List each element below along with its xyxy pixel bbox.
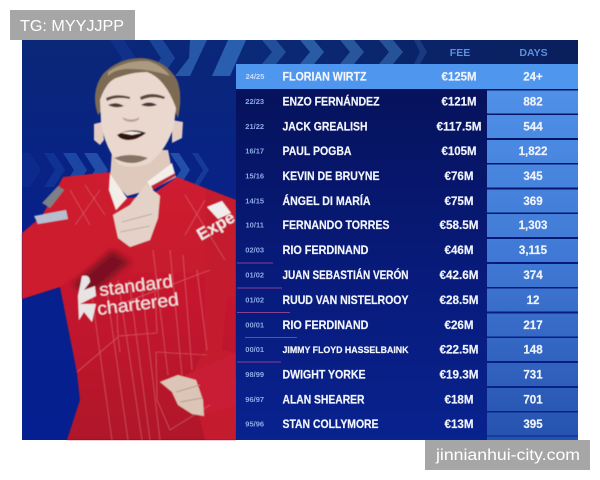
- row: Dwight Yorke: €19.3M: [440, 369, 478, 381]
- column header: days: DAYS: [519, 47, 548, 59]
- row: Florian Wirtz: €125M: [442, 71, 476, 83]
- row: Alan Shearer: 96/97: [245, 395, 264, 404]
- row: Kevin De Bruyne: 345: [523, 171, 543, 183]
- row: Enzo Fernández: 882: [523, 96, 543, 108]
- row: Alan Shearer: 701: [523, 394, 543, 406]
- row: Ángel Di María: 369: [523, 196, 543, 208]
- row: Paul Pogba: 1,822: [519, 146, 547, 158]
- row: Florian Wirtz: 24/25: [246, 72, 264, 81]
- row: Rio Ferdinand 02/03: RIO FERDINAND: [282, 245, 368, 257]
- row: Stan Collymore: 395: [523, 419, 543, 431]
- row: Jimmy Floyd Hasselbaink: [245, 338, 578, 361]
- cuff: [185, 353, 236, 414]
- row: Rio Ferdinand 02/03: €46M: [444, 245, 474, 257]
- row: Kevin De Bruyne: 15/16: [245, 171, 264, 180]
- row: Ruud van Nistelrooy: 12: [527, 295, 539, 307]
- hair highlight: [108, 61, 170, 76]
- shirt body: [60, 172, 236, 440]
- goatee: [114, 155, 148, 163]
- row: Ángel Di María: ÁNGEL DI MARÍA: [282, 195, 370, 208]
- sponsor text: [96, 271, 180, 319]
- row: Jimmy Floyd Hasselbaink: 148: [523, 344, 543, 356]
- upper hand: [113, 184, 160, 247]
- nose: [122, 117, 140, 122]
- watermark: bottom right: jinnianhui-city.com: [435, 447, 580, 464]
- row: Rio Ferdinand 02/03: 3,115: [519, 245, 548, 257]
- row: Ángel Di María: [245, 190, 578, 212]
- row: Enzo Fernández: 22/23: [245, 97, 264, 106]
- row: Florian Wirtz: 24+: [523, 71, 543, 83]
- row: Jack Grealish: [245, 115, 578, 138]
- row: Fernando Torres: [246, 214, 578, 237]
- row: Dwight Yorke: 731: [523, 369, 543, 381]
- row: Ángel Di María: 14/15: [245, 196, 264, 205]
- row: Stan Collymore: [245, 412, 578, 436]
- table rows panel background: [236, 89, 578, 440]
- row: Jack Grealish: 544: [523, 121, 543, 133]
- lower hand: [160, 375, 204, 416]
- next row sliver: [487, 436, 578, 440]
- row: Kevin De Bruyne: KEVIN DE BRUYNE: [282, 171, 380, 183]
- row: Alan Shearer: €18M: [444, 394, 474, 406]
- sponsor text: chartered: [96, 289, 180, 319]
- row: Paul Pogba: 16/17: [245, 146, 264, 155]
- row: Kevin De Bruyne: [245, 164, 578, 188]
- eyebrows: [106, 95, 130, 101]
- row: Enzo Fernández: €121M: [442, 96, 476, 108]
- panel: infographic background: [22, 40, 578, 440]
- row: Dwight Yorke: [245, 363, 578, 386]
- champions league patch: [42, 186, 64, 208]
- player photo: [22, 58, 238, 440]
- ears: [94, 122, 104, 145]
- row: Enzo Fernández: [245, 90, 578, 114]
- row: Paul Pogba: €105M: [442, 146, 476, 158]
- neck: [110, 150, 172, 196]
- row: Ruud van Nistelrooy: €28.5M: [440, 295, 478, 307]
- row: Jack Grealish: €117.5M: [436, 121, 482, 133]
- row: Enzo Fernández: ENZO FERNÁNDEZ: [282, 95, 380, 108]
- watermark: top left: [10, 10, 135, 40]
- standard chartered logo mark: [78, 276, 96, 322]
- right arm and cuff: [190, 188, 237, 440]
- middle chevron pattern: [22, 153, 209, 187]
- row: Fernando Torres: 10/11: [246, 220, 264, 229]
- row: Rio Ferdinand 02/03: [245, 239, 578, 262]
- row: Dwight Yorke: 98/99: [245, 370, 264, 379]
- row: Ruud van Nistelrooy: RUUD VAN NISTELROOY: [282, 295, 409, 307]
- row: Jack Grealish: 21/22: [245, 122, 264, 131]
- column header: fee: FEE: [450, 47, 470, 59]
- row: Stan Collymore: 95/96: [245, 419, 264, 428]
- row: Rio Ferdinand 00/01: RIO FERDINAND: [282, 320, 368, 332]
- row: Jimmy Floyd Hasselbaink: 00/01: [245, 345, 264, 354]
- row: Jack Grealish: JACK GREALISH: [282, 121, 368, 133]
- row: Rio Ferdinand 00/01: €26M: [444, 320, 474, 332]
- row: Fernando Torres: €58.5M: [440, 220, 478, 232]
- row: Ángel Di María: €75M: [444, 196, 474, 208]
- sleeve badge: [34, 210, 68, 224]
- watermark: top left: TG: MYYJJPP: [20, 18, 124, 35]
- expedia text: Expe: [194, 208, 238, 244]
- hair: [95, 58, 180, 118]
- row: Rio Ferdinand 00/01: 217: [523, 320, 543, 332]
- row: Stan Collymore: STAN COLLYMORE: [282, 419, 379, 431]
- row: Dwight Yorke: DWIGHT YORKE: [282, 369, 366, 381]
- pinstripes: [70, 185, 225, 440]
- row: Juan Sebastián Verón: 374: [523, 270, 543, 282]
- row: Stan Collymore: €13M: [444, 419, 474, 431]
- row: Fernando Torres: FERNANDO TORRES: [282, 220, 390, 232]
- top chevron pattern: [110, 40, 427, 76]
- row: Florian Wirtz: [236, 64, 578, 89]
- row: Kevin De Bruyne: €76M: [444, 171, 474, 183]
- row: Juan Sebastián Verón: 01/02: [245, 270, 264, 279]
- row: Juan Sebastián Verón: [245, 264, 578, 287]
- sponsor text: standard: [98, 271, 174, 300]
- row: Alan Shearer: [245, 388, 578, 411]
- row: Alan Shearer: ALAN SHEARER: [282, 394, 365, 406]
- row: Fernando Torres: 1,303: [519, 220, 547, 232]
- row: Juan Sebastián Verón: JUAN SEBASTIÁN VERÓN: [282, 269, 408, 282]
- row: Jimmy Floyd Hasselbaink: JIMMY FLOYD HASSELBAINK: [282, 345, 409, 356]
- header band: [236, 40, 578, 64]
- eyes: [108, 103, 124, 107]
- row: Rio Ferdinand 00/01: [245, 314, 578, 336]
- expedia badge: [207, 201, 231, 219]
- row: Rio Ferdinand 02/03: 02/03: [245, 245, 264, 254]
- collar: [109, 174, 127, 210]
- pink accent lines: [237, 263, 297, 362]
- row: Juan Sebastián Verón: €42.6M: [440, 270, 478, 282]
- watermark: bottom right: [425, 440, 590, 470]
- row: Ruud van Nistelrooy: [245, 288, 578, 312]
- row: Paul Pogba: PAUL POGBA: [282, 146, 352, 158]
- row: Jimmy Floyd Hasselbaink: €22.5M: [440, 344, 478, 356]
- row: Ruud van Nistelrooy: 01/02: [245, 295, 264, 304]
- shirt shadow under arm: [72, 250, 130, 296]
- left arm sleeve: [22, 176, 118, 299]
- face: [100, 72, 176, 167]
- row: Florian Wirtz: FLORIAN WIRTZ: [282, 71, 366, 83]
- row: Rio Ferdinand 00/01: 00/01: [245, 320, 264, 329]
- mouth: [117, 130, 146, 140]
- row: Paul Pogba: [245, 140, 578, 163]
